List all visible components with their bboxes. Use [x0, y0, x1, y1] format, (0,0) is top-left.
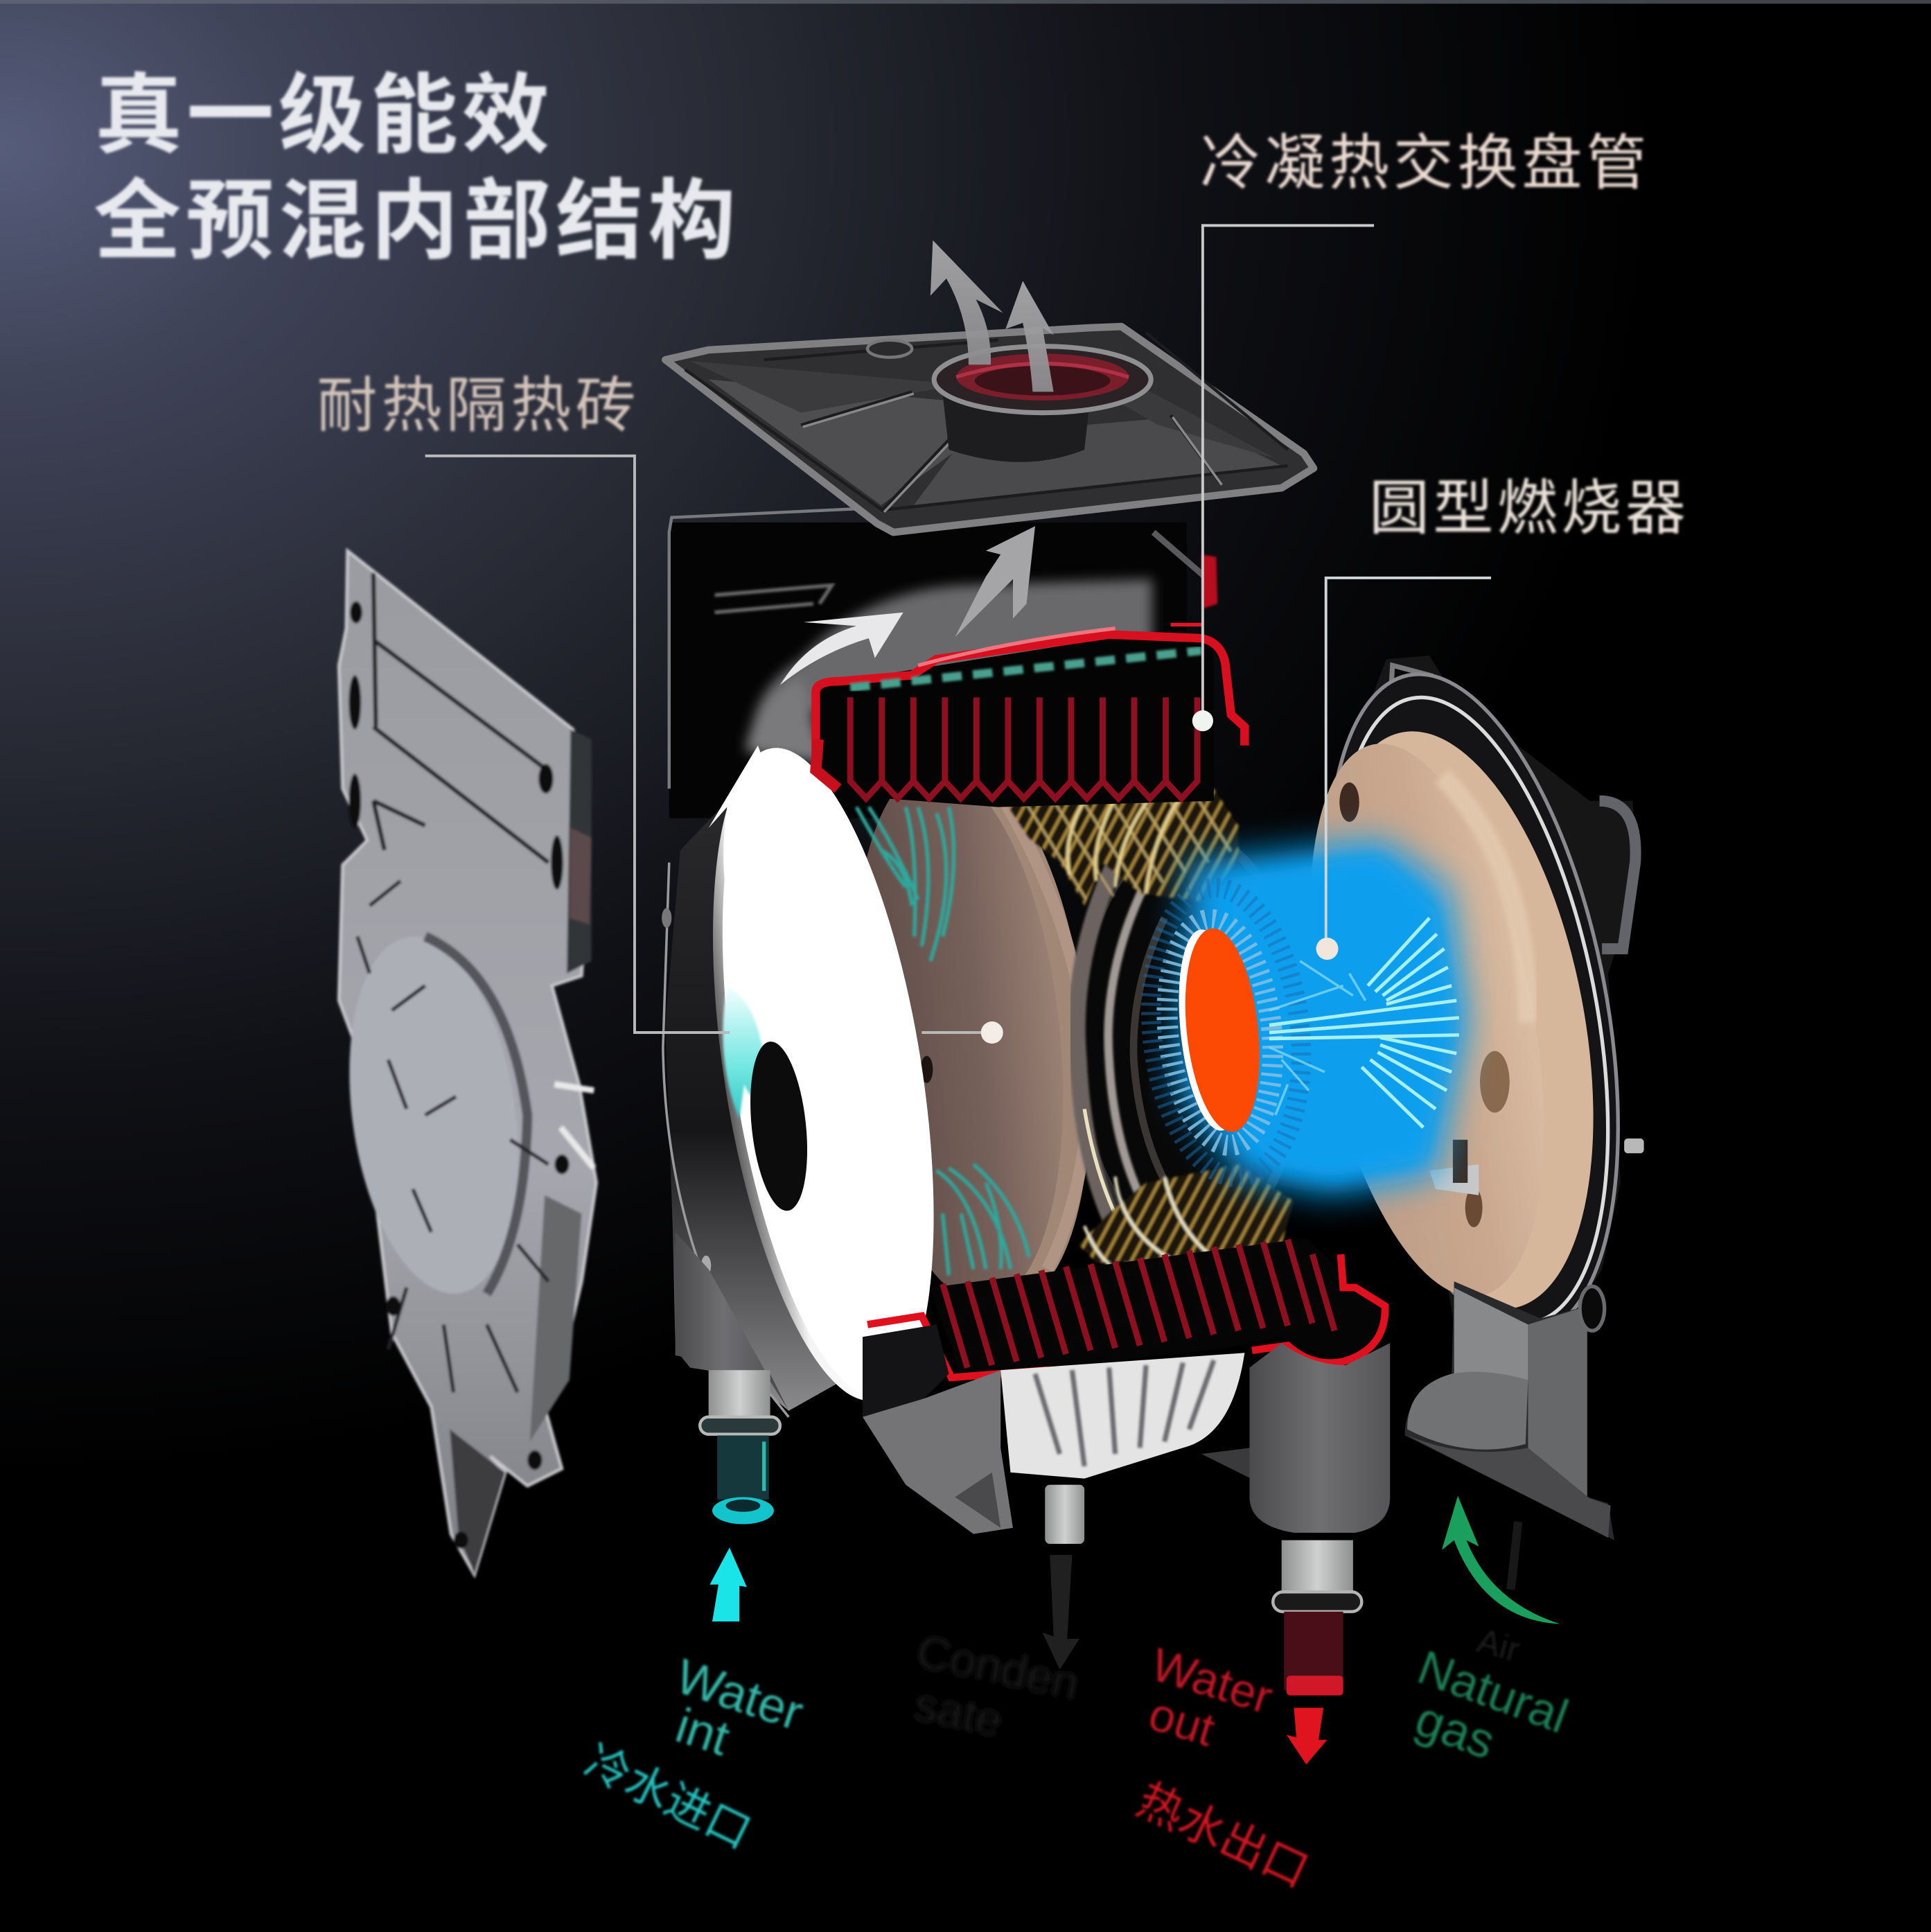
white swirl arrow on disc	[709, 746, 779, 949]
callout: condensing coil: 冷凝热交换盘管	[1200, 130, 1650, 197]
burner radial fins	[1138, 880, 1459, 1185]
brown inner insulation disc	[830, 757, 1114, 1312]
callout: heat-resistant brick	[317, 372, 1003, 1044]
title: 全预混内部结构	[94, 173, 741, 270]
left side cover plate	[328, 551, 597, 1574]
top red condensing coil	[815, 554, 1244, 807]
label: water outlet: Water	[1145, 1638, 1278, 1724]
white heat exchanger front disc	[674, 733, 972, 1416]
callout: round burner	[1316, 475, 1689, 960]
back flange ring	[662, 789, 888, 1417]
label: natural gas: Air	[1473, 1621, 1524, 1669]
left grey water column	[676, 1232, 788, 1411]
beige burner back plate	[1269, 708, 1637, 1332]
rear black housing	[669, 508, 1208, 818]
label: water inlet: Water	[669, 1649, 809, 1741]
exhaust collar with red inner ring	[934, 346, 1151, 413]
label: water outlet: out	[1143, 1687, 1221, 1757]
exhaust arrows	[780, 240, 1054, 685]
label: condensate faint: sate	[910, 1678, 1007, 1748]
title: 真一级能效	[95, 67, 554, 164]
label: natural gas: Natural	[1411, 1640, 1575, 1744]
coil underside chrome section	[863, 1324, 1251, 1534]
bottom red condensing coil	[867, 1238, 1386, 1378]
label: water inlet	[577, 1649, 809, 1859]
red outlet arrow	[1287, 1707, 1328, 1764]
label: condensate faint	[910, 1625, 1084, 1748]
orange burner flame core	[1170, 924, 1269, 1136]
yellow spiral fins top	[1000, 789, 1238, 906]
label: water inlet: 冷水进口	[577, 1736, 759, 1859]
dark combustion chamber rings	[1076, 834, 1303, 1281]
internal flow arrow small	[715, 586, 832, 613]
green gas arrow	[1442, 1496, 1560, 1624]
yellow spiral fins bottom	[1078, 1164, 1294, 1269]
cyan inlet arrow	[709, 1547, 747, 1622]
right flange with mounting tabs	[1278, 650, 1667, 1359]
label: natural gas	[1409, 1621, 1575, 1770]
hot water outlet column	[1249, 1343, 1390, 1696]
gas bracket	[1405, 1281, 1614, 1540]
exploded heat exchanger assembly	[662, 240, 1667, 1764]
teal coil windings	[856, 807, 1029, 1275]
label: condensate faint: Conden	[912, 1625, 1084, 1710]
callout: condensing coil	[1192, 130, 1650, 731]
cyan swirl arrow near opening	[723, 985, 791, 1124]
top exhaust plate	[665, 326, 1314, 532]
cold water inlet pipe	[700, 1370, 780, 1524]
grey cylinder body	[746, 579, 1152, 764]
callout: heat-resistant brick: 耐热隔热砖	[317, 372, 640, 439]
condensate drain nozzle	[1045, 1485, 1084, 1544]
central opening	[743, 1039, 815, 1213]
blue burner glow	[1177, 841, 1466, 1195]
label: water outlet	[1129, 1638, 1316, 1897]
label: water outlet: 热水出口	[1129, 1773, 1316, 1897]
label: water inlet: int	[669, 1698, 736, 1766]
callout: round burner: 圆型燃烧器	[1369, 475, 1689, 542]
label: natural gas: gas	[1409, 1692, 1502, 1770]
title	[94, 67, 741, 270]
condensate down arrow faint	[1043, 1555, 1079, 1669]
